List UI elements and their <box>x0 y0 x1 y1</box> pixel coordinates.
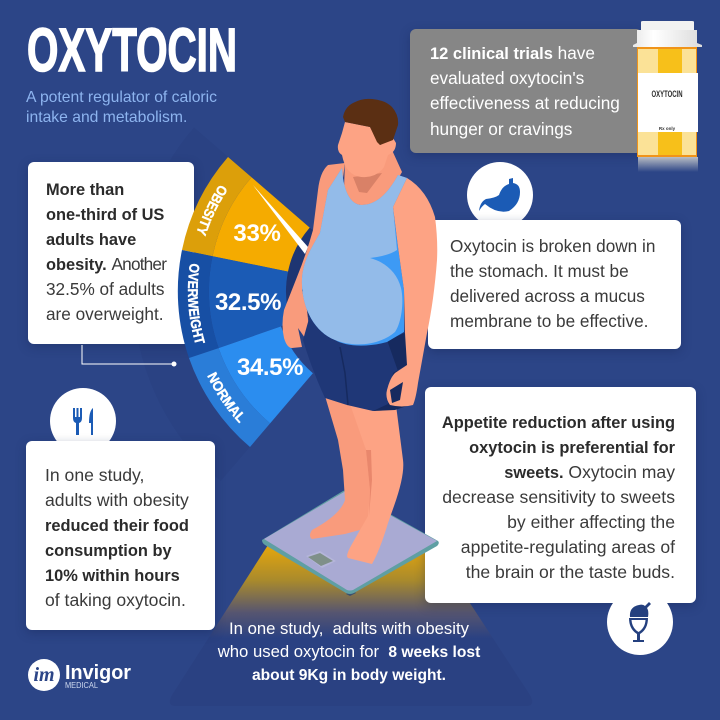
subtitle: intake and metabolism. <box>26 109 187 126</box>
logo: Invigor Medical: MEDICAL <box>65 681 99 690</box>
segment: overweight: 32.5% <box>215 289 281 316</box>
text: food consumption: reduced their food <box>45 517 189 535</box>
panel: obesity statistics <box>28 162 194 344</box>
needle <box>253 185 308 254</box>
right leg <box>347 404 403 564</box>
text: obesity statistics <box>46 181 167 324</box>
segment: overweight: OVERWEIGHT <box>188 264 206 344</box>
panel: food consumption <box>26 441 215 630</box>
text: obesity statistics: 32.5% of adults <box>46 279 164 299</box>
icon: bathroom scale <box>262 490 439 596</box>
text: appetite reduction: by either affecting the <box>507 512 675 532</box>
subtitle: A potent regulator of caloric <box>26 89 217 106</box>
left leg <box>310 396 371 539</box>
tank top <box>302 168 407 346</box>
neck <box>344 150 402 205</box>
left arm <box>282 163 345 348</box>
text: stomach: the stomach. It must be <box>450 261 629 281</box>
icon: stomach <box>467 162 533 228</box>
text: obesity statistics: adults have <box>46 231 136 249</box>
panel: appetite reduction <box>425 387 696 603</box>
belly highlight <box>302 168 407 344</box>
text: food consumption <box>45 465 189 610</box>
text: obesity statistics: are overweight. <box>46 304 164 324</box>
subtitle <box>26 89 217 126</box>
text: clinical trials <box>430 43 620 139</box>
text: appetite reduction: Appetite reduction after using <box>442 414 675 432</box>
segment: obesity: 33% <box>233 220 281 247</box>
text: obesity statistics: obesity. Another <box>46 254 166 274</box>
text: stomach: membrane to be effective. <box>450 311 648 331</box>
text: weight loss result <box>218 619 480 684</box>
text: appetite reduction: sweets. Oxytocin may <box>504 462 675 482</box>
icon: oxytocin bottle <box>633 21 702 172</box>
logo: Invigor Medical <box>28 659 131 691</box>
light beam under scale <box>170 545 532 706</box>
text: clinical trials: evaluated oxytocin's <box>430 68 584 88</box>
text: clinical trials: hunger or cravings <box>430 119 572 139</box>
segment: obesity <box>182 157 310 272</box>
head <box>338 122 396 177</box>
icon: oxytocin bottle: OXYTOCIN <box>652 89 682 99</box>
icon: sundae <box>607 589 673 655</box>
background sector behind fan <box>133 128 383 481</box>
text: stomach <box>450 236 655 331</box>
icon: oxytocin bottle: Rx only <box>659 126 676 131</box>
icon: fork and knife <box>50 388 116 454</box>
connector from panel to fan <box>82 345 176 366</box>
text: appetite reduction: decrease sensitivity to sweets <box>442 487 675 507</box>
logo: Invigor Medical: Invigor <box>65 662 131 684</box>
chart: BMI fan <box>178 157 313 447</box>
text: weight loss result: who used oxytocin for 8 weeks lost <box>218 642 480 661</box>
text: clinical trials: 12 clinical trials have <box>430 43 595 63</box>
shorts <box>303 315 410 411</box>
segment: normal <box>189 326 313 447</box>
text: weight loss result: about 9Kg in body weight. <box>252 667 446 684</box>
text: obesity statistics: one-third of US <box>46 206 164 224</box>
segment: overweight <box>178 250 288 358</box>
text: clinical trials: effectiveness at reducing <box>430 93 620 113</box>
segment: normal: NORMAL <box>207 372 244 424</box>
text: weight loss result: In one study, adults with obesity <box>229 619 469 638</box>
text: appetite reduction <box>442 414 676 582</box>
text: food consumption: consumption by <box>45 542 172 560</box>
text: appetite reduction: oxytocin is preferential for <box>469 439 675 457</box>
logo: Invigor Medical: im <box>33 664 55 686</box>
right arm <box>386 178 437 406</box>
text: food consumption: 10% within hours <box>45 567 180 585</box>
text: food consumption: of taking oxytocin. <box>45 590 186 610</box>
segment: normal: 34.5% <box>237 354 303 381</box>
panel: stomach <box>428 220 681 349</box>
text: obesity statistics: More than <box>46 181 124 199</box>
text: appetite reduction: appetite-regulating areas of <box>461 537 675 557</box>
text: food consumption: In one study, <box>45 465 144 485</box>
text: stomach: delivered across a mucus <box>450 286 645 306</box>
hair <box>343 99 398 145</box>
panel: clinical trials <box>410 29 642 153</box>
figure: man on scale <box>282 99 437 564</box>
text: stomach: Oxytocin is broken down in <box>450 236 655 256</box>
segment: obesity: OBESITY <box>197 186 227 237</box>
text: food consumption: adults with obesity <box>45 490 189 510</box>
text: appetite reduction: the brain or the taste buds. <box>466 562 675 582</box>
